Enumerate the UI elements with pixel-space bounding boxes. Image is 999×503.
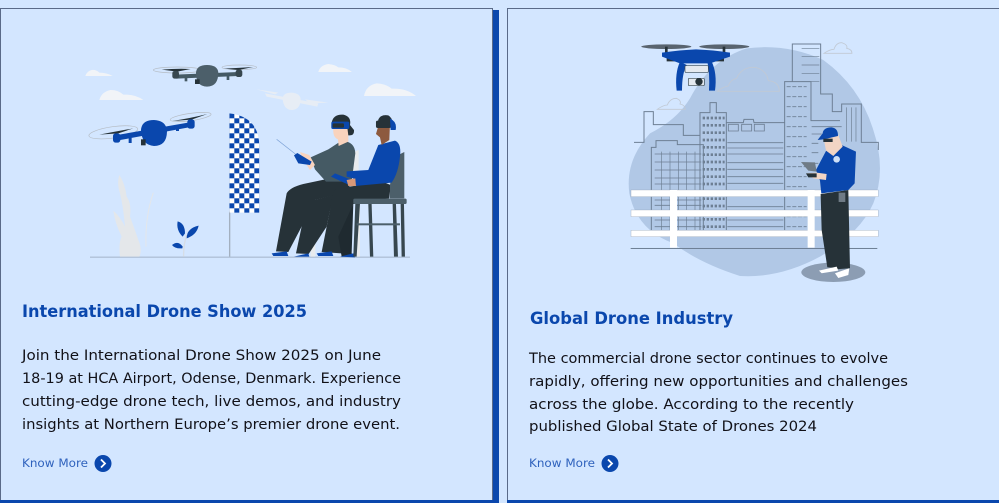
railing (631, 190, 878, 248)
text block: show description (21, 348, 401, 433)
link: Know More (22, 455, 112, 472)
clouds (85, 64, 416, 100)
pale plant (113, 175, 153, 257)
text block: show description: Join the International Drone Show 2025 on June (21, 348, 381, 364)
link: Know More (529, 455, 618, 472)
person two (317, 115, 407, 257)
clouds (657, 43, 852, 109)
city outlines (634, 44, 878, 230)
link: Know More: Know More (529, 456, 595, 470)
heading: Global Drone Industry: Global Drone Industry (530, 309, 733, 329)
ground shadow (801, 263, 865, 282)
text block: show description: 18-19 at HCA Airport, Odense, Denmark. Experience (22, 371, 401, 387)
person one (272, 115, 355, 257)
blue drone (88, 110, 212, 146)
checkered flag (229, 113, 259, 257)
drone (641, 44, 749, 91)
operator (801, 127, 856, 278)
panel: Global Drone Industry card (507, 8, 999, 503)
text block: industry description: The commercial drone sector continues to evolve (528, 351, 888, 367)
link: Know More: Know More (22, 456, 88, 470)
illustration: drone operator and city (629, 43, 880, 282)
pale drone (257, 89, 328, 110)
pale chair (310, 150, 360, 257)
illustration: drone pilots (85, 64, 416, 258)
icon: arrow circle (602, 455, 618, 472)
blue plant (172, 221, 199, 257)
dark drone (153, 65, 257, 87)
text block: show description: cutting-edge drone tech, live demos, and industry (22, 394, 401, 410)
blob background (629, 47, 880, 276)
panel: International Drone Show card (0, 8, 499, 503)
text block: show description: insights at Northern Europe’s premier drone event. (22, 417, 400, 433)
ground line (90, 256, 410, 259)
text block: industry description (528, 351, 908, 435)
text block: industry description: rapidly, offering new opportunities and challenges (529, 374, 908, 390)
text block: industry description: published Global State of Drones 2024 (529, 419, 817, 435)
heading: International Drone Show 2025: International Drone Show 2025 (22, 302, 307, 322)
text block: industry description: across the globe. According to the recently (529, 397, 854, 413)
icon: arrow circle (94, 455, 112, 472)
